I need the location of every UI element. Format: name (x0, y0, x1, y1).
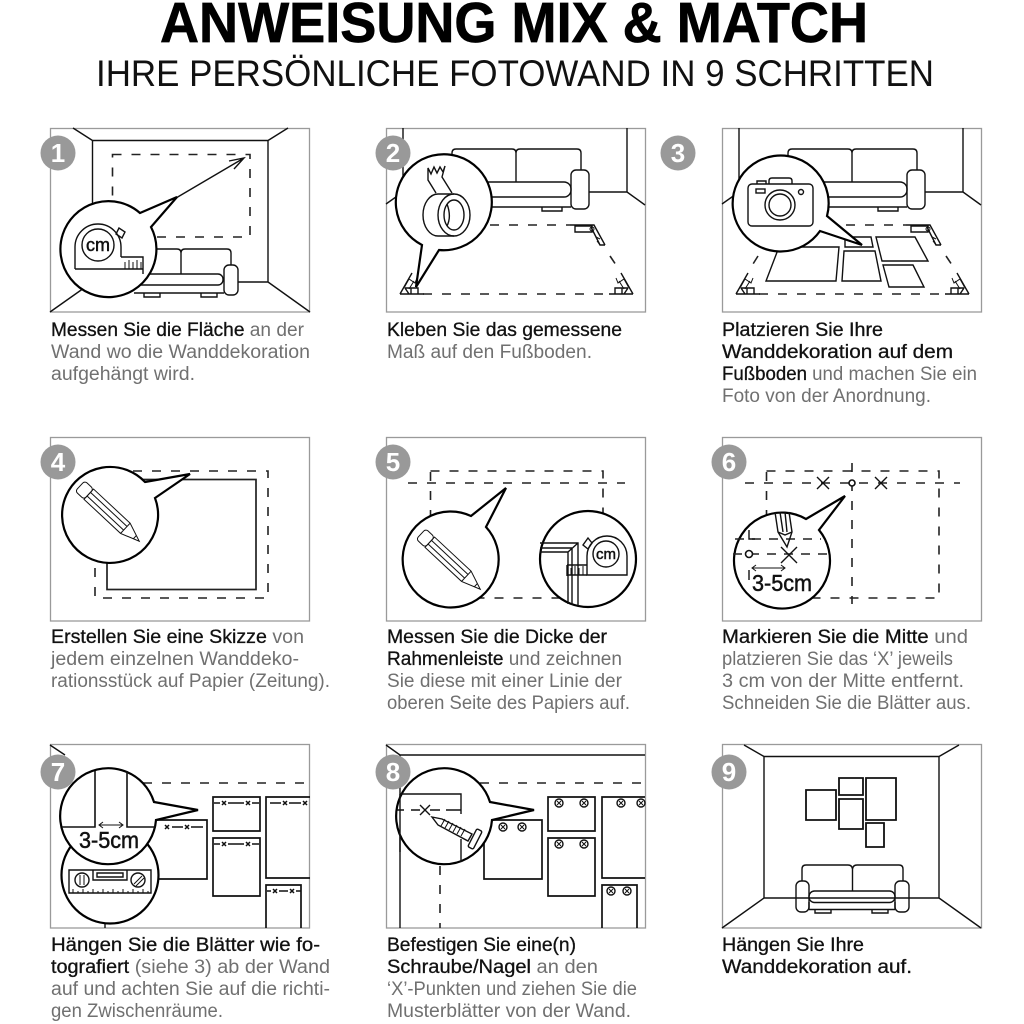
text: step 3: Platzieren Sie Ihre (722, 320, 883, 341)
text: Musterblätter von der Wand. (387, 1001, 631, 1022)
text: Maß auf den Fußboden. (387, 342, 592, 363)
panel: step 2 illustration (386, 128, 646, 312)
panel: step 9 illustration (722, 744, 982, 928)
callout: tape measure: cm (86, 235, 110, 255)
step badge 8: 8 (386, 757, 400, 787)
callout: spirit level (62, 826, 158, 924)
text: Schraube/Nagel an den (387, 957, 598, 978)
text: Wanddekoration auf dem (722, 342, 953, 363)
text: rationsstück auf Papier (Zeitung). (51, 671, 330, 692)
text: aufgehängt wird. (51, 364, 195, 385)
panel: step 6 illustration (722, 438, 982, 621)
callout: screw (396, 768, 534, 864)
callout: frame and tape measure: cm (596, 546, 616, 563)
step badge 1: 1 (51, 138, 65, 168)
text: step 8: Befestigen Sie eine(n) (387, 935, 576, 956)
callout: pencil (62, 467, 190, 563)
text: Rahmenleiste und zeichnen (387, 649, 622, 670)
text: Wand wo die Wanddekoration (51, 342, 310, 363)
callout: frame and tape measure (540, 511, 636, 607)
callout: 3-5cm gap: 3-5cm (79, 827, 139, 853)
callout: 3-5cm mark (733, 496, 845, 609)
step badge 3 (660, 136, 696, 170)
text: step 5: Messen Sie die Dicke der (387, 627, 608, 648)
text: auf und achten Sie auf die richti- (51, 979, 330, 1000)
step badge 2 (376, 136, 410, 170)
step badge 6: 6 (722, 447, 736, 477)
callout: tape roll (396, 154, 492, 287)
text: oberen Seite des Papiers auf. (387, 693, 630, 714)
callout: camera (733, 156, 862, 252)
step badge 7 (40, 754, 76, 790)
text: platzieren Sie das ‘X’ jeweils (722, 649, 953, 670)
text: step 4: Erstellen Sie eine Skizze von (51, 627, 304, 648)
text: step 1: Messen Sie die Fläche an der (51, 320, 305, 341)
text: step 2: Kleben Sie das gemessene (387, 320, 622, 341)
text: step 9: Hängen Sie Ihre (722, 935, 864, 956)
step badge 5: 5 (386, 447, 400, 477)
panel: step 4 illustration (50, 438, 310, 621)
step badge 7: 7 (51, 757, 65, 787)
picture frames (806, 778, 896, 847)
panel: step 7 illustration (50, 744, 310, 928)
step badge 8 (376, 754, 410, 790)
text: Wanddekoration auf. (722, 957, 912, 978)
step badge 5 (376, 444, 410, 480)
step badge 4 (40, 444, 76, 480)
text: gen Zwischenräume. (51, 1001, 223, 1022)
panel: step 3 illustration (722, 128, 982, 312)
panel: step 8 illustration (386, 744, 646, 928)
text: step 7: Hängen Sie die Blätter wie fo- (51, 935, 320, 956)
subtitle: IHRE PERSÖNLICHE FOTOWAND IN 9 SCHRITTEN (96, 53, 934, 94)
step badge 9 (712, 754, 746, 790)
step badge 9: 9 (722, 757, 736, 787)
text: Sie diese mit einer Linie der (387, 671, 623, 692)
callout: pencil (403, 488, 506, 607)
step badge 2: 2 (386, 138, 400, 168)
step badge 4: 4 (51, 447, 66, 477)
text: jedem einzelnen Wanddeko- (50, 649, 299, 670)
step badge 3: 3 (671, 138, 685, 168)
text: tografiert (siehe 3) ab der Wand (51, 957, 330, 978)
step badge 1 (40, 136, 76, 170)
step badge 6 (712, 444, 746, 480)
text: step 6: Markieren Sie die Mitte und (722, 627, 968, 648)
callout: 3-5cm gap (60, 768, 198, 864)
panel: step 1 illustration (50, 128, 310, 312)
callout: tape measure (60, 197, 177, 297)
text: Foto von der Anordnung. (722, 386, 931, 407)
text: Fußboden und machen Sie ein (722, 364, 977, 385)
text: ‘X’-Punkten und ziehen Sie die (387, 979, 637, 1000)
text: Schneiden Sie die Blätter aus. (722, 693, 971, 714)
panel: step 5 illustration (386, 438, 646, 621)
text: 3 cm von der Mitte entfernt. (722, 671, 964, 692)
callout: 3-5cm mark: 3-5cm (752, 570, 812, 596)
sofa (796, 865, 909, 913)
